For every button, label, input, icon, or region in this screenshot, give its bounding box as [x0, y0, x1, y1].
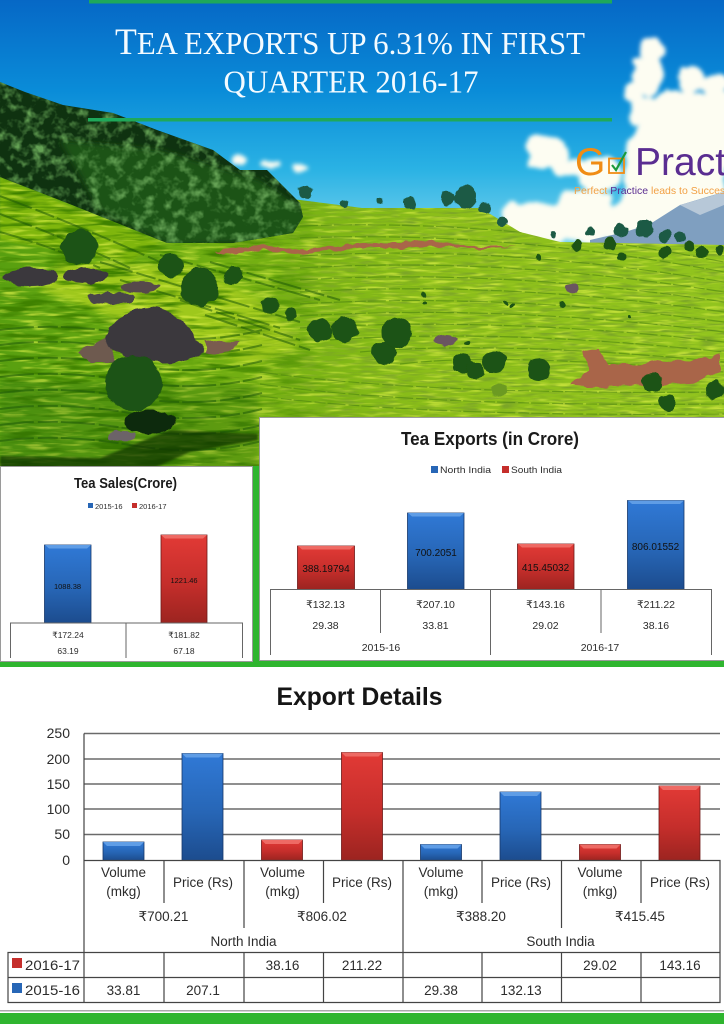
- category labels: Price (Rs): [491, 875, 551, 890]
- bar: North India volume 2016-17: [262, 840, 302, 860]
- bar chart axis and gridlines: 150: [47, 776, 70, 792]
- bar: North India volume 2015-16: [103, 842, 144, 860]
- category labels: ₹388.20: [456, 909, 506, 924]
- table: exports data: 29.38: [312, 620, 339, 632]
- bar: South India 2015-16: 388.19794: [302, 564, 350, 575]
- table: exports data: [270, 590, 712, 655]
- category labels: Price (Rs): [173, 875, 233, 890]
- table: sales data: 67.18: [173, 646, 195, 656]
- row: 2016-17: 38.16: [266, 958, 299, 973]
- bar: 2015-16 sales: 1088.38: [54, 582, 81, 591]
- tea rows: lower left: [0, 196, 340, 450]
- bar chart axis and gridlines: 50: [54, 826, 70, 842]
- soil strips: [215, 240, 720, 388]
- row: 2015-16: 29.38: [424, 983, 458, 998]
- rocks: [2, 268, 579, 441]
- bar: North India 2015-16: 700.2051: [415, 548, 457, 559]
- row: 2016-17: [12, 957, 701, 973]
- bar: 2016-17 sales: [161, 535, 207, 623]
- category labels: Price (Rs): [650, 875, 710, 890]
- category labels: ₹806.02: [297, 909, 347, 924]
- legend: regions: North India: [440, 465, 492, 476]
- table: sales data: [10, 623, 242, 658]
- category labels: ₹415.45: [615, 909, 665, 924]
- table: exports data: ₹211.22: [637, 599, 675, 611]
- row: 2015-16: 2015-16: [25, 982, 80, 998]
- category labels: North India: [210, 934, 277, 949]
- title: [115, 22, 585, 100]
- bar: North India 2016-17: [628, 500, 684, 590]
- table: exports data: ₹207.10: [416, 599, 455, 611]
- title: TEA EXPORTS UP 6.31% IN FIRST: [115, 22, 585, 63]
- lower green rule: [88, 118, 612, 122]
- row: 2016-17: 2016-17: [25, 957, 80, 973]
- panel: Export Details: [8, 683, 720, 1002]
- logo: GoPractice: G: [575, 141, 605, 184]
- row: 2015-16: 132.13: [500, 983, 542, 998]
- category labels: Volume: [101, 865, 146, 880]
- heading: Tea Sales: Tea Sales(Crore): [74, 476, 177, 492]
- bar: South India price 2015-16: [500, 792, 541, 860]
- table: exports data: ₹143.16: [526, 599, 565, 611]
- bottom green band: [0, 1010, 724, 1024]
- distant mountain: [590, 192, 724, 250]
- data table: [8, 860, 720, 1002]
- bar: South India 2015-16: [298, 546, 354, 590]
- category labels: (mkg): [583, 884, 617, 899]
- table: sales data: ₹172.24: [52, 630, 84, 640]
- bar: North India price 2015-16: [182, 754, 223, 860]
- top green rule: [89, 0, 612, 4]
- table: sales data: 63.19: [57, 646, 79, 656]
- category labels: Volume: [577, 865, 623, 880]
- bar chart axis and gridlines: 0: [62, 852, 70, 868]
- category labels: (mkg): [265, 884, 300, 899]
- table: sales data: ₹181.82: [168, 630, 200, 640]
- bar: South India 2016-17: 415.45032: [522, 563, 570, 574]
- table: exports data: 29.02: [532, 620, 559, 632]
- bar chart axis and gridlines: 200: [47, 751, 70, 767]
- bar: South India volume 2016-17: [580, 844, 620, 860]
- tea rows: right slope: [260, 225, 724, 414]
- heading: Export Details: Export Details: [276, 683, 442, 711]
- table: exports data: ₹132.13: [306, 599, 345, 611]
- bar: South India 2016-17: [518, 544, 574, 590]
- sky: [0, 0, 724, 260]
- legend: sales years: [88, 502, 167, 511]
- category labels: (mkg): [106, 884, 141, 899]
- panel: Tea Sales chart: [0, 466, 252, 662]
- bar: 2015-16 sales: [44, 545, 91, 623]
- bar: South India price 2016-17: [659, 786, 700, 860]
- bar: North India 2015-16: [408, 513, 464, 590]
- category labels: Volume: [418, 865, 464, 880]
- row: 2015-16: 207.1: [186, 983, 220, 998]
- category labels: Volume: [260, 865, 305, 880]
- forest on left hill: [0, 82, 303, 243]
- bar: North India price 2016-17: [342, 752, 382, 860]
- table: exports data: 2016-17: [581, 642, 619, 654]
- background photo: tea plantation landscape: [0, 0, 724, 470]
- logo: GoPractice: [574, 141, 724, 197]
- legend: sales years: 2015-16: [95, 502, 123, 511]
- legend: regions: South India: [511, 465, 563, 476]
- bar: North India 2016-17: 806.01552: [632, 542, 680, 553]
- green frame behind chart panels: [0, 417, 724, 667]
- category labels: Price (Rs): [332, 875, 392, 890]
- table: exports data: 33.81: [422, 620, 449, 632]
- table: exports data: 38.16: [643, 620, 669, 632]
- bushes and trees: [62, 229, 724, 434]
- bar: 2016-17 sales: 1221.46: [170, 576, 198, 585]
- heading: Tea Exports: Tea Exports (in Crore): [401, 429, 579, 449]
- row: 2016-17: 29.02: [583, 958, 617, 973]
- treeline on the ridge: [298, 185, 686, 243]
- category labels: [101, 865, 710, 949]
- clouds: [231, 38, 724, 242]
- category labels: (mkg): [424, 884, 458, 899]
- row: 2015-16: [12, 982, 542, 998]
- legend: sales years: 2016-17: [139, 502, 167, 511]
- category labels: ₹700.21: [139, 909, 188, 924]
- bar: South India volume 2015-16: [420, 844, 462, 860]
- bar chart axis and gridlines: 250: [47, 725, 70, 741]
- legend: regions: [431, 465, 563, 476]
- tea field base: [0, 170, 724, 470]
- bar chart axis and gridlines: 100: [47, 801, 70, 817]
- bar chart axis and gridlines: [47, 725, 720, 952]
- panel: Tea Exports chart: [260, 418, 724, 660]
- row: 2015-16: 33.81: [107, 983, 140, 998]
- table: exports data: 2015-16: [362, 642, 400, 654]
- category labels: South India: [526, 934, 595, 949]
- title: QUARTER 2016-17: [224, 64, 478, 100]
- row: 2016-17: 143.16: [659, 958, 701, 973]
- row: 2016-17: 211.22: [342, 958, 382, 973]
